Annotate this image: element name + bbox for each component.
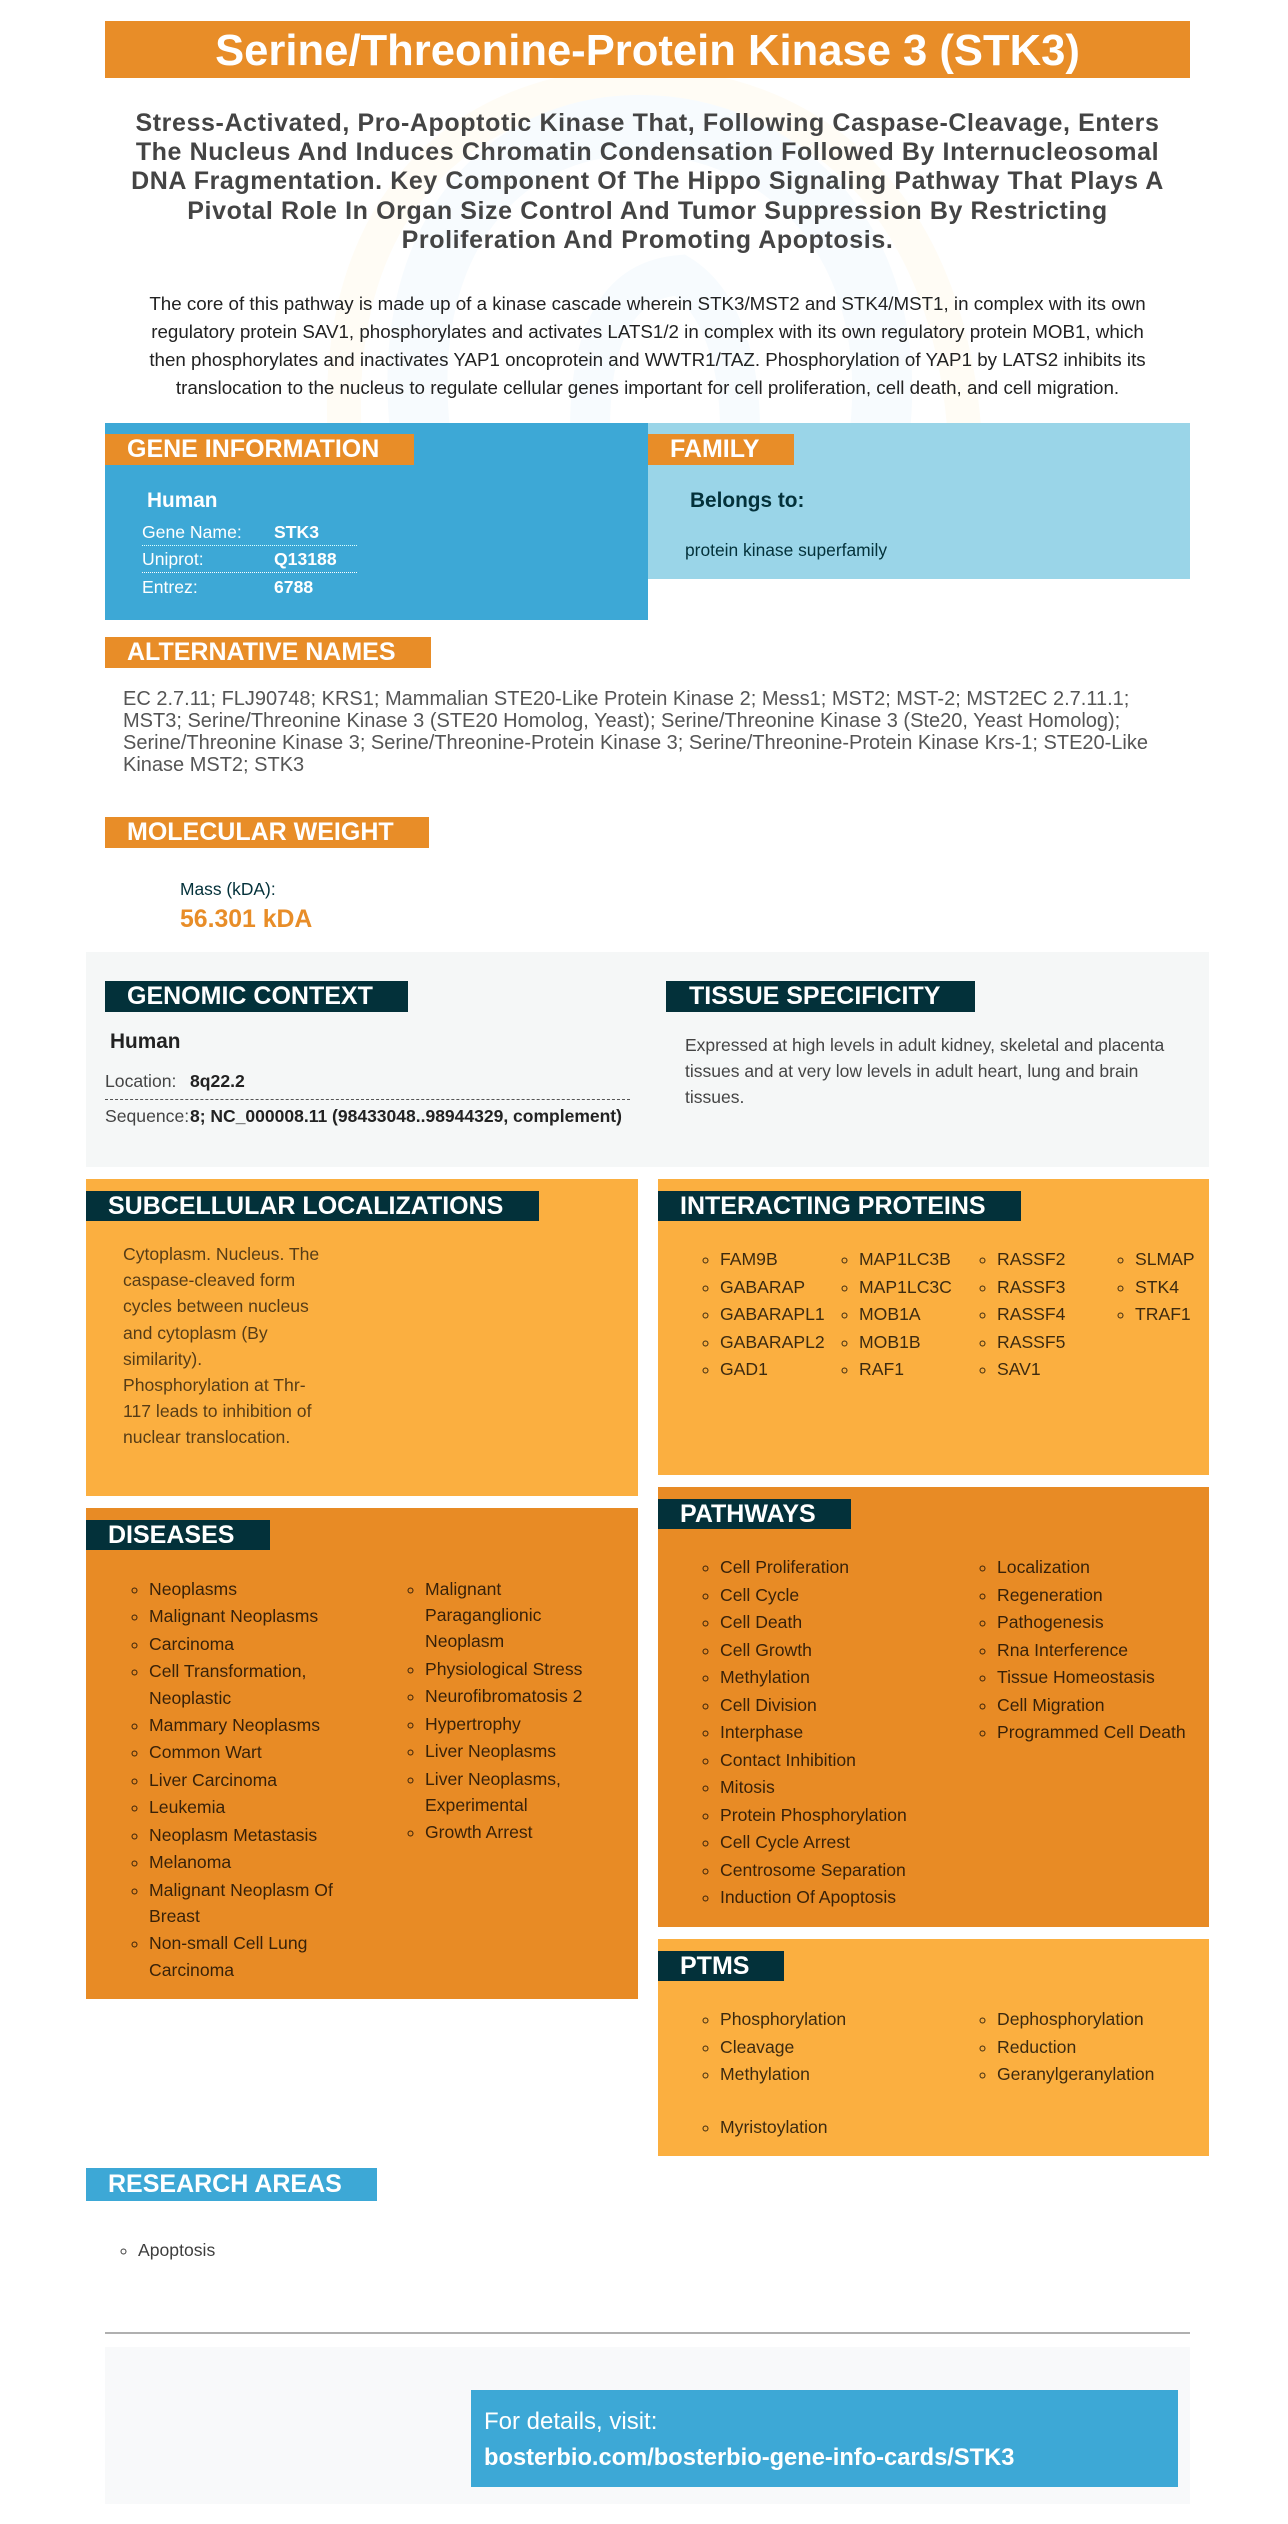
species label: Human — [110, 1030, 180, 1053]
heading: family: FAMILY — [670, 435, 759, 463]
protein list column 4: STK4 — [1135, 1276, 1179, 1296]
alternative names text — [123, 688, 1148, 776]
callout url: bosterbio.com/bosterbio-gene-info-cards/STK3 — [484, 2445, 1014, 2471]
disease list column 2: Liver Neoplasms — [425, 1741, 556, 1761]
callout label: For details, visit: — [484, 2408, 657, 2435]
heading: tissue specificity: TISSUE SPECIFICITY — [689, 982, 940, 1010]
alternative names text: EC 2.7.11; FLJ90748; KRS1; Mammalian STE20-Like Protein Kinase 2; Mess1; MST2; MST-2; MST2EC 2.7.11.1; — [123, 688, 1129, 710]
PTM list column 2: Reduction — [997, 2036, 1076, 2056]
disease list column 1: Neoplasms — [149, 1579, 237, 1599]
pathway list column 1: Cell Proliferation — [720, 1557, 849, 1577]
title banner — [105, 21, 1190, 78]
pathway list column 1: Protein Phosphorylation — [720, 1804, 907, 1824]
localization text: caspase-cleaved form — [123, 1270, 295, 1290]
disease list column 1: Malignant Neoplasm Of — [149, 1880, 333, 1900]
pathway list column 2: Localization — [997, 1557, 1090, 1577]
heading: research areas — [86, 2168, 377, 2201]
PTM list column 2 — [980, 2009, 1154, 2084]
subtitle summary: Pivotal Role In Organ Size Control And Tumor Suppression By Restricting — [187, 197, 1108, 225]
disease list column 1: Malignant Neoplasms — [149, 1606, 318, 1626]
panel: genomic context and tissue specificity: 8; NC_000008.11 (98433048..98944329, complement) — [190, 1106, 622, 1126]
localization text — [123, 1244, 319, 1447]
disease list column 2: Physiological Stress — [425, 1659, 582, 1679]
pathway list column 2: Pathogenesis — [997, 1612, 1104, 1632]
pathway description paragraph: translocation to the nucleus to regulate cellular genes important for cell proliferation, cell death, and cell migration. — [176, 377, 1119, 398]
disease list column 1: Cell Transformation, — [149, 1661, 306, 1681]
pathway description paragraph — [149, 293, 1146, 398]
PTM list column 2: Dephosphorylation — [997, 2009, 1144, 2029]
disease list column 1: Liver Carcinoma — [149, 1770, 277, 1790]
protein list column 3: RASSF2 — [997, 1249, 1065, 1269]
disease list column 1: Breast — [149, 1906, 200, 1926]
panel: interacting proteins — [658, 1179, 1209, 1475]
PTM list column 1: Cleavage — [720, 2036, 794, 2056]
background watermark logo — [327, 78, 980, 423]
protein list column 4: SLMAP — [1135, 1249, 1195, 1269]
research areas list: Apoptosis — [138, 2240, 215, 2260]
PTM list column 1 — [702, 2009, 846, 2136]
PTM list column 1: Myristoylation — [720, 2116, 828, 2136]
protein list column 3: RASSF5 — [997, 1332, 1065, 1352]
heading: alternative names: ALTERNATIVE NAMES — [127, 638, 396, 666]
disease list column 2: Paraganglionic — [425, 1605, 541, 1625]
pathway list column 1: Cell Cycle — [720, 1584, 799, 1604]
pathway list column 1: Induction Of Apoptosis — [720, 1887, 896, 1907]
protein list column 2: MAP1LC3B — [859, 1249, 951, 1269]
mass value: 56.301 kDA — [180, 906, 312, 933]
pathway list column 2 — [980, 1557, 1186, 1742]
family value: protein kinase superfamily — [685, 540, 887, 560]
protein list column 3 — [980, 1249, 1065, 1379]
protein list column 2: MOB1A — [859, 1304, 921, 1324]
heading: gene information: GENE INFORMATION — [127, 435, 379, 463]
subtitle summary: The Nucleus And Induces Chromatin Condensation Followed By Internucleosomal — [136, 138, 1159, 166]
pathway description paragraph: The core of this pathway is made up of a kinase cascade wherein STK3/MST2 and STK4/MST1, in complex with its own — [149, 293, 1146, 314]
disease list column 1: Carcinoma — [149, 1634, 234, 1654]
belongs to label: Belongs to: — [690, 489, 804, 512]
disease list column 2 — [408, 1579, 582, 1842]
panel: gene information — [105, 423, 648, 620]
localization text: similarity). — [123, 1349, 202, 1369]
panel: footer — [105, 2347, 1190, 2504]
heading: pathways — [658, 1499, 851, 1529]
disease list column 1 — [132, 1579, 333, 1980]
panel: pathways — [658, 1487, 1209, 1927]
disease list column 1: Neoplastic — [149, 1688, 231, 1708]
heading: PTMs — [658, 1951, 784, 1981]
pathway list column 2: Regeneration — [997, 1584, 1103, 1604]
disease list column 1: Carcinoma — [149, 1960, 234, 1980]
panel: family — [648, 423, 1190, 579]
alternative names text: Serine/Threonine Kinase 3; Serine/Threonine-Protein Kinase 3; Serine/Threonine-Protein Kinase Krs-1; STE20-Like — [123, 732, 1148, 754]
protein list column 3: RASSF4 — [997, 1304, 1065, 1324]
subtitle summary — [131, 109, 1164, 254]
pathway list column 1: Cell Death — [720, 1612, 802, 1632]
mass label: Mass (kDA): — [180, 879, 276, 899]
heading: molecular weight: MOLECULAR WEIGHT — [127, 818, 394, 846]
tissue specificity text: tissues and at very low levels in adult heart, lung and brain — [685, 1061, 1138, 1081]
alternative names text: MST3; Serine/Threonine Kinase 3 (STE20 Homolog, Yeast); Serine/Threonine Kinase 3 (Ste20, Yeast Homolog); — [123, 710, 1120, 732]
subtitle summary: Stress-Activated, Pro-Apoptotic Kinase That, Following Caspase-Cleavage, Enters — [135, 109, 1160, 137]
protein list column 3: SAV1 — [997, 1359, 1041, 1379]
panel: genomic context and tissue specificity: 8q22.2 — [190, 1071, 245, 1091]
heading: diseases: DISEASES — [108, 1521, 234, 1549]
protein list column 3: RASSF3 — [997, 1276, 1065, 1296]
disease list column 1: Common Wart — [149, 1742, 262, 1762]
protein list column 1 — [702, 1249, 825, 1379]
pathway list column 2: Tissue Homeostasis — [997, 1667, 1155, 1687]
protein list column 1: GABARAP — [720, 1276, 805, 1296]
pathway list column 1: Cell Division — [720, 1694, 817, 1714]
pathway list column 1 — [702, 1557, 907, 1907]
gene identifiers table: 6788 — [274, 577, 313, 597]
protein list column 4 — [1118, 1249, 1195, 1324]
subtitle summary: DNA Fragmentation. Key Component Of The Hippo Signaling Pathway That Plays A — [131, 167, 1164, 195]
protein list column 1: GABARAPL2 — [720, 1332, 825, 1352]
pathway list column 1: Cell Growth — [720, 1640, 812, 1660]
gene identifiers table: STK3 — [274, 522, 319, 542]
PTM list column 1: Phosphorylation — [720, 2009, 846, 2029]
panel: PTMs — [658, 1939, 1209, 2156]
disease list column 1: Leukemia — [149, 1797, 225, 1817]
pathway list column 2: Programmed Cell Death — [997, 1722, 1186, 1742]
tissue specificity text — [685, 1035, 1164, 1107]
pathway list column 1: Methylation — [720, 1667, 810, 1687]
heading: pathways: PATHWAYS — [680, 1500, 816, 1528]
location row: Location: — [105, 1071, 176, 1091]
disease list column 1: Melanoma — [149, 1852, 231, 1872]
disease list column 2: Malignant — [425, 1579, 501, 1599]
heading: family — [648, 434, 794, 465]
disease list column 2: Liver Neoplasms, — [425, 1769, 561, 1789]
protein list column 1: GABARAPL1 — [720, 1304, 825, 1324]
disease list column 1: Non-small Cell Lung — [149, 1933, 307, 1953]
gene identifiers table: Entrez: — [142, 577, 198, 597]
protein list column 2: MOB1B — [859, 1332, 921, 1352]
localization text: nuclear translocation. — [123, 1427, 290, 1447]
disease list column 1: Mammary Neoplasms — [149, 1715, 320, 1735]
heading: PTMs: PTMS — [680, 1952, 749, 1980]
pathway list column 1: Cell Cycle Arrest — [720, 1832, 850, 1852]
gene identifiers table: Gene Name: — [142, 522, 242, 542]
PTM list column 2: Geranylgeranylation — [997, 2064, 1154, 2084]
panel: genomic context and tissue specificity — [86, 952, 1209, 1167]
subtitle summary: Proliferation And Promoting Apoptosis. — [402, 226, 893, 254]
gene identifiers table: Uniprot: — [142, 549, 204, 569]
pathway list column 2: Rna Interference — [997, 1640, 1128, 1660]
localization text: cycles between nucleus — [123, 1296, 309, 1316]
pathway list column 1: Mitosis — [720, 1777, 775, 1797]
gene identifiers table — [142, 522, 357, 597]
pathway list column 1: Interphase — [720, 1722, 803, 1742]
heading: diseases — [86, 1520, 270, 1550]
gene identifiers table: Q13188 — [274, 549, 337, 569]
pathway list column 2: Cell Migration — [997, 1694, 1105, 1714]
PTM list column 1: Methylation — [720, 2064, 810, 2084]
panel: subcellular localizations — [86, 1179, 638, 1496]
protein list column 4: TRAF1 — [1135, 1304, 1191, 1324]
alternative names text: Kinase MST2; STK3 — [123, 754, 304, 776]
pathway list column 1: Centrosome Separation — [720, 1860, 906, 1880]
callout: details link — [471, 2390, 1178, 2487]
protein list column 2 — [842, 1249, 952, 1379]
protein list column 2: RAF1 — [859, 1359, 904, 1379]
pathway description paragraph: regulatory protein SAV1, phosphorylates and activates LATS1/2 in complex with its own regulatory protein MOB1, which — [151, 321, 1144, 342]
tissue specificity text: tissues. — [685, 1087, 744, 1107]
tissue specificity text: Expressed at high levels in adult kidney, skeletal and placenta — [685, 1035, 1164, 1055]
heading: interacting proteins: INTERACTING PROTEINS — [680, 1192, 986, 1220]
heading: subcellular localizations: SUBCELLULAR LOCALIZATIONS — [108, 1192, 503, 1220]
species label: Human — [147, 489, 217, 512]
disease list column 2: Hypertrophy — [425, 1714, 521, 1734]
localization text: Phosphorylation at Thr- — [123, 1375, 306, 1395]
protein list column 1: GAD1 — [720, 1359, 768, 1379]
disease list column 2: Experimental — [425, 1795, 528, 1815]
disease list column 2: Neurofibromatosis 2 — [425, 1686, 582, 1706]
disease list column 1: Neoplasm Metastasis — [149, 1825, 317, 1845]
pathway list column 1: Contact Inhibition — [720, 1750, 856, 1770]
disease list column 2: Neoplasm — [425, 1631, 504, 1651]
sequence row: Sequence: — [105, 1106, 189, 1126]
panel: diseases — [86, 1508, 638, 1999]
heading: genomic context: GENOMIC CONTEXT — [127, 982, 373, 1010]
heading: research areas: RESEARCH AREAS — [108, 2170, 342, 2198]
localization text: and cytoplasm (By — [123, 1323, 268, 1343]
protein list column 1: FAM9B — [720, 1249, 778, 1269]
localization text: 117 leads to inhibition of — [123, 1401, 311, 1421]
title banner: Serine/Threonine-Protein Kinase 3 (STK3) — [215, 27, 1080, 75]
disease list column 2: Growth Arrest — [425, 1822, 533, 1842]
localization text: Cytoplasm. Nucleus. The — [123, 1244, 319, 1264]
pathway description paragraph: then phosphorylates and inactivates YAP1 oncoprotein and WWTR1/TAZ. Phosphorylation of YAP1 by LATS2 inhibits its — [149, 349, 1146, 370]
protein list column 2: MAP1LC3C — [859, 1276, 952, 1296]
